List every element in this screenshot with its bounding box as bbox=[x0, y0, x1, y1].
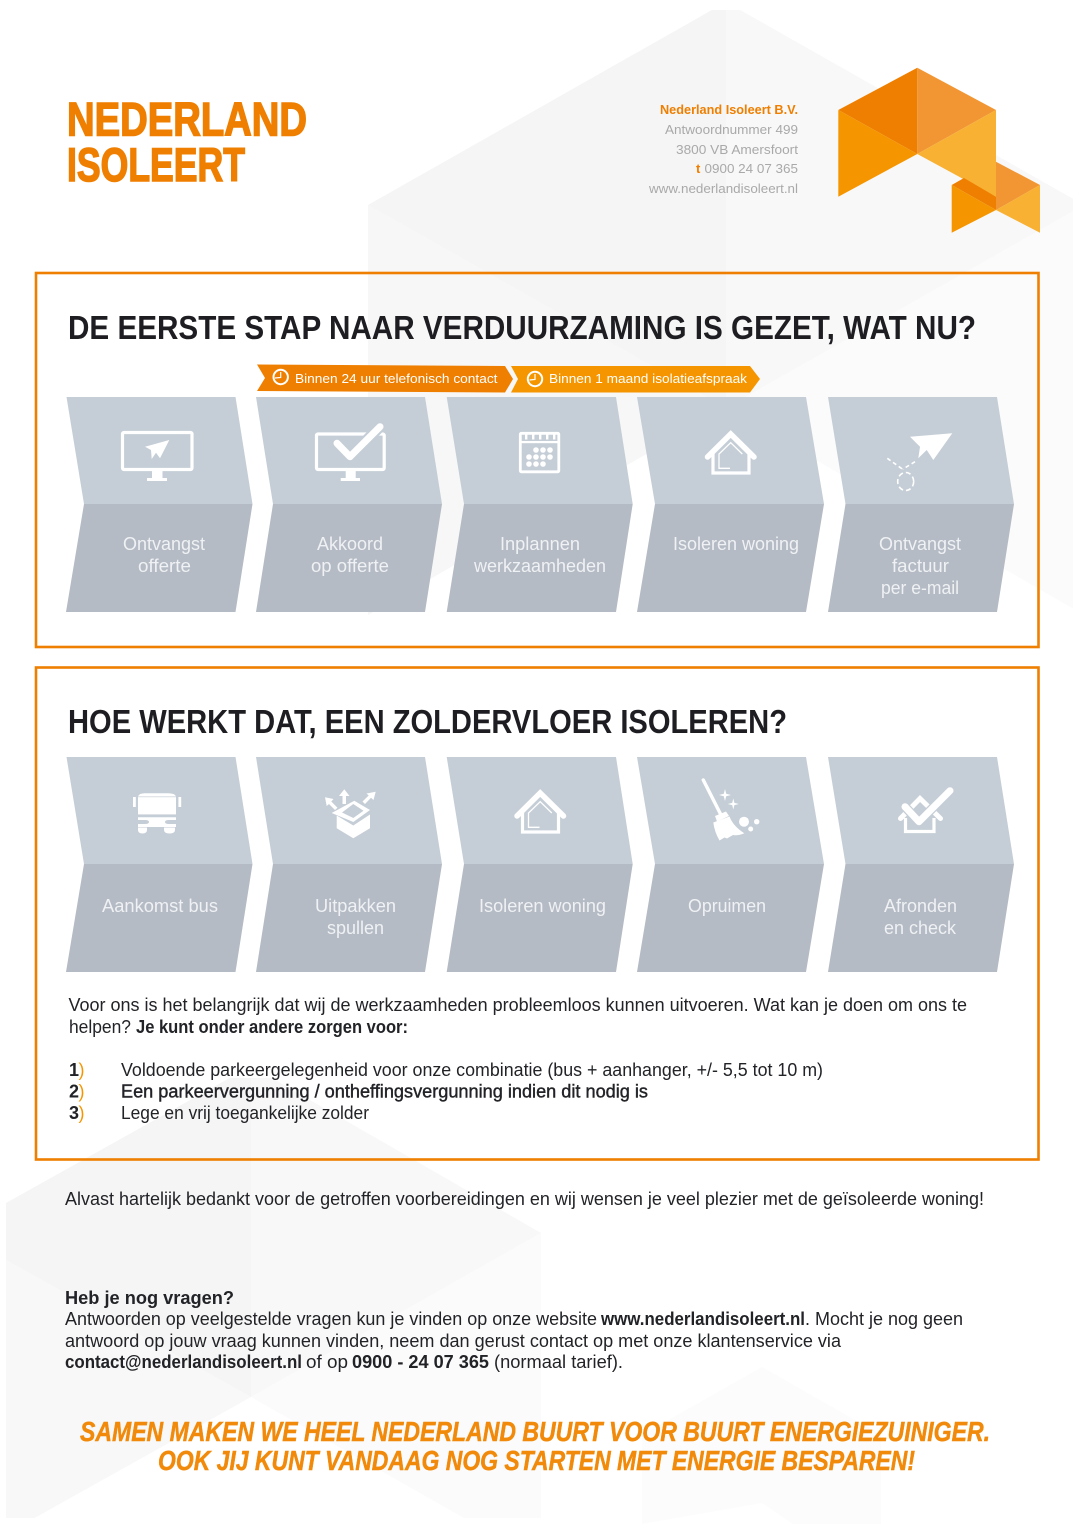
numbered list: Voldoende parkeergelegenheid voor onze combinatie (bus + aanhanger, +/- 5,5 tot 10 m) bbox=[121, 1060, 823, 1080]
step: ontvangst offerte bbox=[66, 397, 252, 612]
step: afronden en check: en check bbox=[884, 917, 957, 938]
background hexagon: bottom left bbox=[6, 1078, 251, 1396]
step: ontvangst factuur per e-mail: factuur bbox=[892, 555, 949, 576]
step: uitpakken spullen: spullen bbox=[327, 917, 384, 938]
panel: zoldervloer isoleren bbox=[36, 668, 1038, 1160]
numbered list: Een parkeervergunning / ontheffingsvergunning indien dit nodig is bbox=[121, 1082, 648, 1102]
numbered list: ) bbox=[78, 1103, 84, 1123]
questions block: antwoord op jouw vraag kunnen vinden, neem dan gerust contact op met onze klantenservice via bbox=[65, 1331, 842, 1351]
step: uitpakken spullen: Uitpakken bbox=[315, 895, 396, 916]
company address: www.nederlandisoleert.nl bbox=[648, 181, 798, 196]
step: isoleren woning bbox=[637, 397, 824, 612]
questions block: www.nederlandisoleert.nl bbox=[600, 1309, 805, 1329]
logo wordmark bbox=[67, 92, 307, 191]
company address: t bbox=[696, 161, 701, 176]
heading: zoldervloer: HOE WERKT DAT, EEN ZOLDERVLOER ISOLEREN? bbox=[68, 703, 787, 740]
intro text bbox=[68, 995, 967, 1037]
company address: Antwoordnummer 499 bbox=[665, 122, 798, 137]
icon: monitor with check mark bbox=[316, 427, 384, 481]
icon: bus bbox=[133, 793, 181, 834]
intro text: Je kunt onder andere zorgen voor: bbox=[136, 1017, 408, 1037]
company address: 3800 VB Amersfoort bbox=[676, 142, 798, 157]
numbered list bbox=[69, 1060, 823, 1123]
icon: monitor with paper plane bbox=[122, 432, 192, 481]
intro text: helpen? bbox=[69, 1017, 131, 1037]
step: inplannen werkzaamheden bbox=[447, 397, 633, 612]
step: opruimen: Opruimen bbox=[688, 895, 766, 916]
timing banner: 24 uur: Binnen 24 uur telefonisch contact bbox=[295, 371, 498, 386]
questions block: (normaal tarief). bbox=[494, 1352, 623, 1372]
step: opruimen bbox=[637, 757, 824, 972]
timing banner: 24 uur bbox=[257, 364, 513, 392]
step: ontvangst factuur per e-mail bbox=[828, 397, 1014, 612]
step: isoleren woning bbox=[447, 757, 633, 972]
intro text: Voor ons is het belangrijk dat wij de werkzaamheden probleemloos kunnen uitvoeren. Wat kan je doen om ons te bbox=[68, 995, 967, 1015]
step: akkoord op offerte: Akkoord bbox=[317, 533, 383, 554]
step: inplannen werkzaamheden: werkzaamheden bbox=[473, 555, 606, 576]
panel: eerste stap bbox=[36, 273, 1038, 647]
company address: Nederland Isoleert B.V. bbox=[660, 102, 798, 117]
icon: paper plane with dashed trail bbox=[887, 433, 952, 490]
questions block: contact@nederlandisoleert.nl bbox=[65, 1352, 302, 1372]
step: ontvangst offerte: Ontvangst bbox=[123, 533, 205, 554]
questions block: Heb je nog vragen? bbox=[65, 1288, 234, 1308]
logo wordmark: ISOLEERT bbox=[67, 138, 245, 191]
timing banner: 1 maand bbox=[511, 366, 760, 392]
step: afronden en check bbox=[828, 757, 1014, 972]
step: akkoord op offerte: op offerte bbox=[311, 555, 389, 576]
step: afronden en check: Afronden bbox=[884, 895, 957, 916]
icon: house bbox=[708, 434, 754, 473]
step: ontvangst factuur per e-mail: Ontvangst bbox=[879, 533, 961, 554]
questions block: . Mocht je nog geen bbox=[805, 1309, 963, 1329]
icon: house with check mark bbox=[900, 791, 950, 832]
questions block: 0900 - 24 07 365 bbox=[352, 1352, 489, 1372]
step: akkoord op offerte bbox=[256, 397, 442, 612]
icon: open box with arrows bbox=[325, 789, 376, 838]
numbered list: ) bbox=[78, 1082, 84, 1102]
company address bbox=[648, 102, 798, 196]
closing slogan bbox=[80, 1416, 990, 1476]
step: ontvangst factuur per e-mail: per e-mail bbox=[881, 577, 959, 598]
step: inplannen werkzaamheden: Inplannen bbox=[500, 533, 580, 554]
numbered list: 3 bbox=[69, 1103, 79, 1123]
questions block: Antwoorden op veelgestelde vragen kun je vinden op onze website bbox=[65, 1309, 597, 1329]
icon: orange logo mark bbox=[838, 68, 1040, 233]
icon: calendar bbox=[520, 433, 559, 472]
questions block: of op bbox=[306, 1352, 348, 1372]
numbered list: Lege en vrij toegankelijke zolder bbox=[121, 1103, 369, 1123]
background hexagon: top right bbox=[368, 10, 726, 397]
icon: house bbox=[517, 793, 564, 832]
questions block bbox=[65, 1288, 963, 1372]
logo wordmark: NEDERLAND bbox=[67, 92, 307, 146]
numbered list: 2 bbox=[69, 1082, 79, 1102]
step: ontvangst offerte: offerte bbox=[138, 555, 191, 576]
company address: 0900 24 07 365 bbox=[704, 161, 798, 176]
thank you text: Alvast hartelijk bedankt voor de getroffen voorbereidingen en wij wensen je veel plezier met de geïsoleerde woning! bbox=[65, 1189, 984, 1209]
step: uitpakken spullen bbox=[256, 757, 442, 972]
timing banner: 1 maand: Binnen 1 maand isolatieafspraak bbox=[549, 371, 748, 386]
numbered list: ) bbox=[78, 1060, 84, 1080]
step: aankomst bus: Aankomst bus bbox=[102, 895, 218, 916]
step: isoleren woning: Isoleren woning bbox=[673, 533, 799, 554]
step: isoleren woning: Isoleren woning bbox=[479, 895, 606, 916]
numbered list: 1 bbox=[69, 1060, 79, 1080]
step: aankomst bus bbox=[66, 757, 252, 972]
heading: eerste stap: DE EERSTE STAP NAAR VERDUURZAMING IS GEZET, WAT NU? bbox=[68, 309, 976, 346]
icon: broom with sparkles bbox=[703, 780, 759, 840]
background hexagon: bottom centre bbox=[642, 1367, 881, 1524]
closing slogan: OOK JIJ KUNT VANDAAG NOG STARTEN MET ENERGIE BESPAREN! bbox=[158, 1445, 915, 1476]
